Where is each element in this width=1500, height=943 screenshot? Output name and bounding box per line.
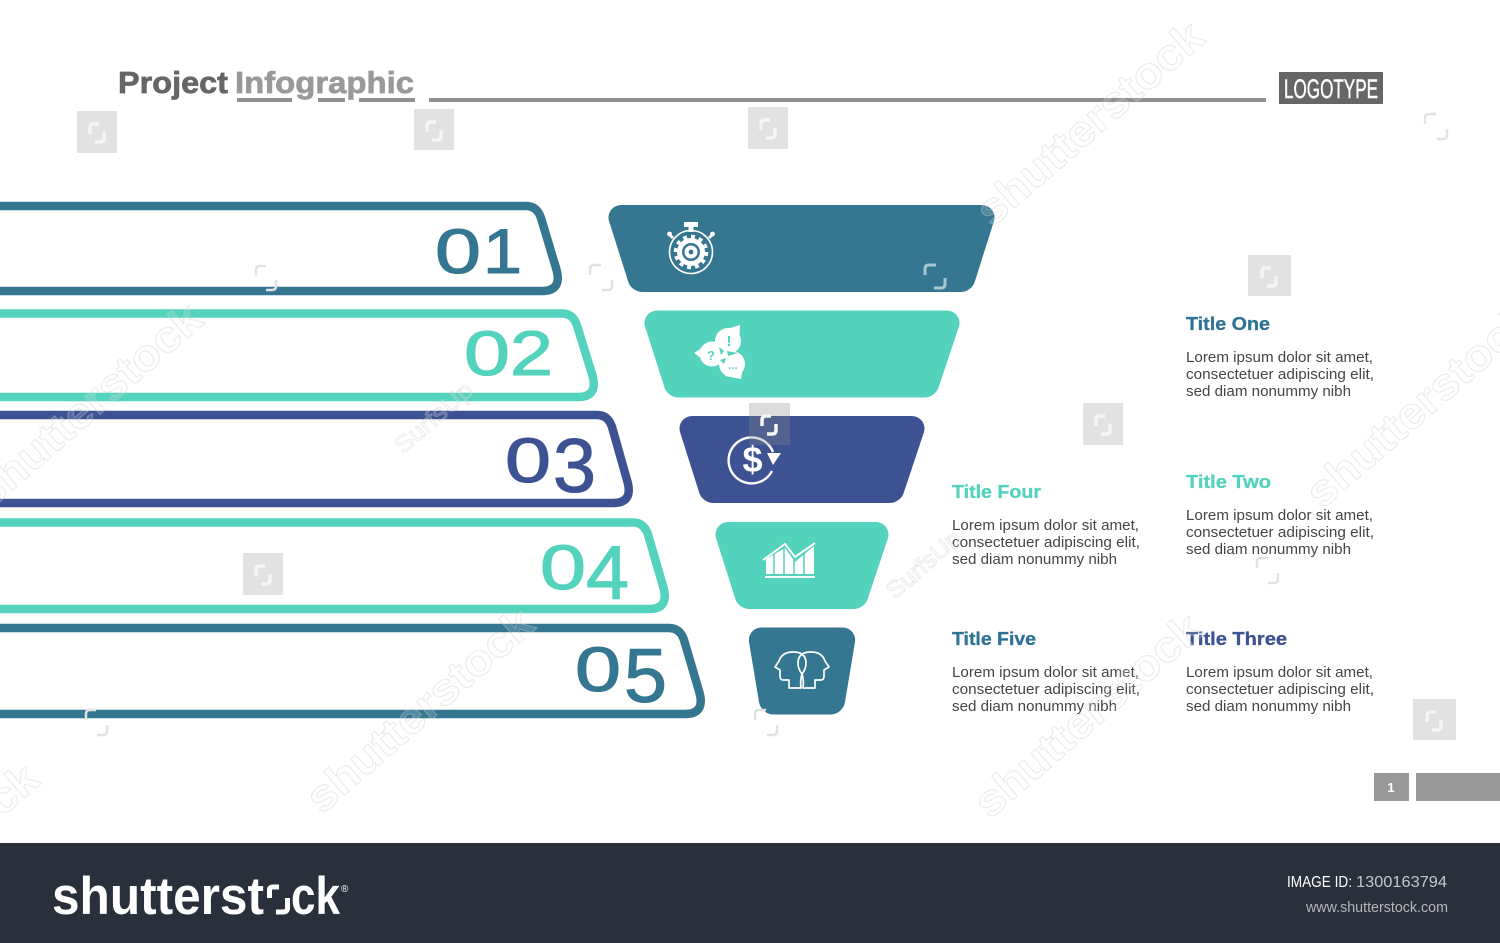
watermark overlay: SurfsUp <box>389 377 479 460</box>
bar 01 <box>0 206 558 291</box>
text block: Title Four: sed diam nonummy nibh <box>952 552 1117 568</box>
text block: Title Four: consectetuer adipiscing elit, <box>952 535 1140 551</box>
text block: Title One: consectetuer adipiscing elit, <box>1186 367 1374 383</box>
icon: three speech bubbles <box>694 325 745 379</box>
bar 03 <box>0 415 629 509</box>
bar 02: 2 <box>510 319 553 389</box>
funnel tier 4 <box>716 522 888 609</box>
text block: Title One <box>1186 314 1374 400</box>
footer band <box>0 843 1500 943</box>
header rule <box>429 98 1266 102</box>
image id: 1300163794 <box>1356 874 1447 891</box>
bar 03: 0 <box>505 426 551 496</box>
header title <box>118 65 415 102</box>
outlined numbered bars <box>0 206 701 719</box>
text block: Title Two: Title Two <box>1186 472 1271 492</box>
watermark overlay: SurfsUp <box>881 525 967 605</box>
text block: Title One: Title One <box>1186 314 1270 334</box>
header title: Project <box>118 65 228 100</box>
bar 03: 3 <box>553 424 596 509</box>
watermark overlay: shutterstock <box>964 603 1212 828</box>
text block: Title Three: sed diam nonummy nibh <box>1186 699 1351 715</box>
text block: Title Two: consectetuer adipiscing elit, <box>1186 525 1374 541</box>
text block: Title Five: consectetuer adipiscing elit, <box>952 682 1140 698</box>
bar 04: 4 <box>586 531 629 616</box>
funnel <box>608 205 994 714</box>
text block: Title Two: sed diam nonummy nibh <box>1186 542 1351 558</box>
bar 04 <box>0 522 665 616</box>
watermark overlay: shutterstock <box>296 598 544 823</box>
image id <box>1287 874 1447 891</box>
logotype badge: LOGOTYPE <box>1284 74 1378 104</box>
bar 02 <box>0 314 594 397</box>
icon: three speech bubbles: ... <box>728 360 738 372</box>
bar 01: 0 <box>435 217 481 287</box>
bar 05: 0 <box>575 635 621 705</box>
funnel tier 2 <box>644 310 960 398</box>
image id: IMAGE ID: <box>1287 874 1352 891</box>
header title: Infographic <box>235 65 414 100</box>
text block: Title Five: Title Five <box>952 629 1036 649</box>
page number tabs <box>1374 773 1500 801</box>
shutterstock wordmark: ck <box>291 867 340 926</box>
bar 01: 1 <box>483 217 522 287</box>
website: www.shutterstock.com <box>1305 900 1448 916</box>
text block: Title One: Lorem ipsum dolor sit amet, <box>1186 350 1373 366</box>
text block: Title Four: Lorem ipsum dolor sit amet, <box>952 518 1139 534</box>
bar 05: 5 <box>624 634 667 719</box>
text block: Title Five: Lorem ipsum dolor sit amet, <box>952 665 1139 681</box>
text block: Title Five <box>952 629 1140 715</box>
text block: Title Three: consectetuer adipiscing elit, <box>1186 682 1374 698</box>
icon: bar chart with trend line <box>763 543 815 578</box>
icon: dollar refresh: $ <box>742 439 763 480</box>
shutterstock wordmark: ® <box>341 884 349 895</box>
page number tabs: 1 <box>1387 780 1395 795</box>
bar 02: 0 <box>464 319 510 389</box>
bar 05 <box>0 628 701 719</box>
logotype badge <box>1279 72 1383 104</box>
icon: two heads <box>775 652 829 688</box>
watermark overlay: shutterstock <box>966 11 1214 236</box>
icon: stopwatch with gear <box>667 222 715 274</box>
text block: Title Two: Lorem ipsum dolor sit amet, <box>1186 508 1373 524</box>
text block: Title Four: Title Four <box>952 482 1041 502</box>
icon: three speech bubbles: ? <box>707 348 715 363</box>
text block: Title Five: sed diam nonummy nibh <box>952 699 1117 715</box>
funnel tier 5 <box>749 628 855 714</box>
text block: Title One: sed diam nonummy nibh <box>1186 384 1351 400</box>
shutterstock wordmark: shutterst <box>52 867 264 926</box>
text block: Title Four <box>952 482 1140 568</box>
text block: Title Three: Title Three <box>1186 629 1287 649</box>
icon: dollar refresh <box>729 437 781 483</box>
icon: three speech bubbles: ! <box>726 333 732 350</box>
text block: Title Two <box>1186 472 1374 558</box>
bar 04: 0 <box>540 533 586 603</box>
funnel tier 3 <box>679 416 924 503</box>
text block: Title Three <box>1186 629 1374 715</box>
funnel tier 1 <box>608 205 994 292</box>
text block: Title Three: Lorem ipsum dolor sit amet, <box>1186 665 1373 681</box>
